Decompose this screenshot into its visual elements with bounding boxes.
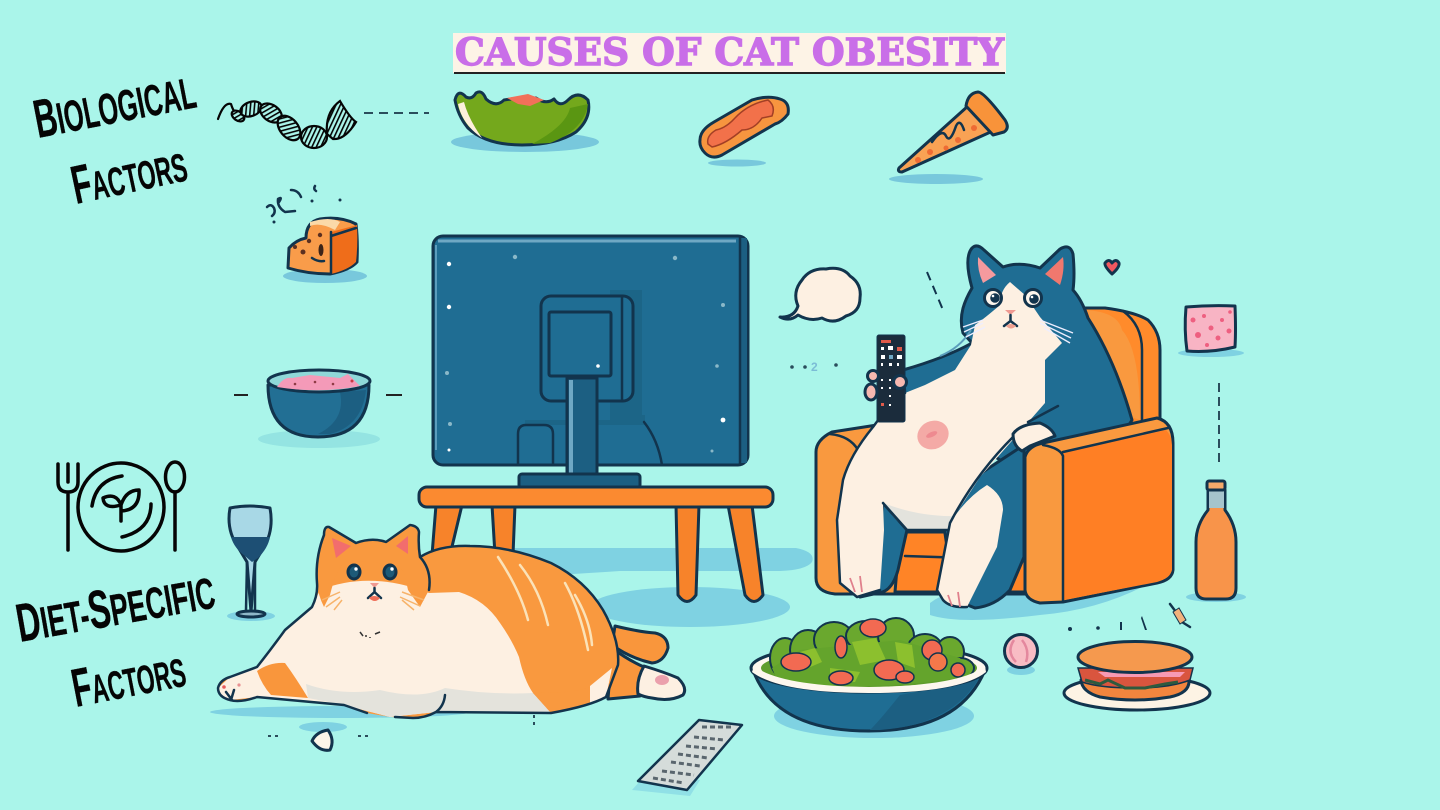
blue legs	[940, 445, 1024, 608]
eyes	[984, 290, 1002, 306]
inner ears	[332, 538, 351, 558]
burger on plate	[1064, 642, 1210, 710]
bowl body	[753, 670, 985, 731]
television	[433, 236, 748, 488]
right leg	[937, 485, 1003, 607]
ellipsis dots: 2	[811, 360, 818, 374]
paw on remote	[865, 370, 906, 400]
nose and mouth	[1005, 310, 1016, 315]
table	[419, 487, 773, 602]
onion ball	[1004, 634, 1038, 675]
tail	[612, 626, 668, 663]
toes	[850, 576, 960, 607]
title: CAUSES OF CAT OBESITY	[455, 30, 1005, 74]
green salad bowl	[451, 92, 599, 152]
question marks	[267, 186, 342, 224]
whiskers	[963, 320, 1073, 343]
bowl dashes	[234, 394, 402, 396]
dots near burger	[1068, 616, 1147, 631]
head mask	[317, 525, 430, 607]
armchair right arm	[1025, 418, 1173, 603]
chest dots	[360, 632, 380, 638]
front rim	[752, 666, 986, 693]
remote on floor	[632, 720, 742, 796]
lettuce	[770, 618, 974, 678]
label: biological factors: FACTORS	[66, 133, 192, 216]
bowl rim	[751, 644, 987, 692]
icon: plate with fork and spoon	[58, 462, 184, 551]
body silhouette	[218, 525, 618, 718]
blue body	[903, 246, 1132, 470]
label: diet-specific factors: FACTORS	[67, 638, 190, 719]
label: diet-specific factors	[12, 560, 219, 719]
dashes near cat	[927, 272, 943, 310]
back leg	[608, 648, 644, 699]
icon: dna helix	[218, 99, 356, 148]
cream belly and chest	[837, 282, 1062, 597]
floor shadows	[210, 548, 1150, 718]
grey underbelly shading	[306, 684, 551, 717]
orange cat lying down	[218, 525, 685, 718]
label: biological factors: BIOLOGICAL	[29, 60, 200, 150]
tiny spoon item	[1170, 604, 1190, 627]
dashed connector	[364, 112, 429, 114]
armchair left arm and seat	[816, 425, 1040, 594]
lettuce highlights	[800, 638, 915, 682]
underbelly orange end	[533, 680, 606, 713]
floor dots	[268, 715, 534, 736]
paw toes	[226, 690, 234, 700]
heart	[1105, 260, 1119, 274]
cat outline	[218, 525, 618, 718]
leg patch	[257, 663, 308, 698]
back stripes	[498, 557, 592, 650]
pizza slice	[889, 92, 1007, 184]
pink food bowl	[258, 370, 380, 448]
blaze lines	[940, 330, 971, 356]
salad bowl	[751, 618, 987, 738]
vertical dashed line	[1218, 383, 1220, 465]
label: diet-specific factors: DIET-SPECIFIC	[12, 560, 219, 654]
speech bubble	[780, 268, 860, 321]
armchair back	[1060, 308, 1160, 425]
small crumb	[299, 722, 347, 750]
blue cat on armchair	[816, 246, 1173, 608]
front paw on arm	[1013, 423, 1055, 451]
underbelly shading	[883, 503, 955, 530]
cream belly	[218, 581, 551, 717]
eyes	[348, 565, 360, 579]
orange bottle	[1186, 481, 1246, 602]
lettuce mass	[772, 640, 972, 686]
label: biological factors	[29, 60, 200, 216]
wine glass	[227, 506, 275, 621]
remote in hand	[877, 335, 905, 422]
nose and mouth	[370, 583, 379, 588]
navel	[913, 416, 953, 454]
hot dog	[700, 97, 788, 166]
whiskers	[322, 592, 424, 610]
ellipsis dots	[790, 360, 838, 374]
tomatoes	[781, 619, 965, 685]
belly outline	[837, 393, 950, 597]
ears inner	[978, 257, 996, 283]
cheese bread piece	[283, 218, 367, 283]
pink food square	[1178, 306, 1244, 357]
